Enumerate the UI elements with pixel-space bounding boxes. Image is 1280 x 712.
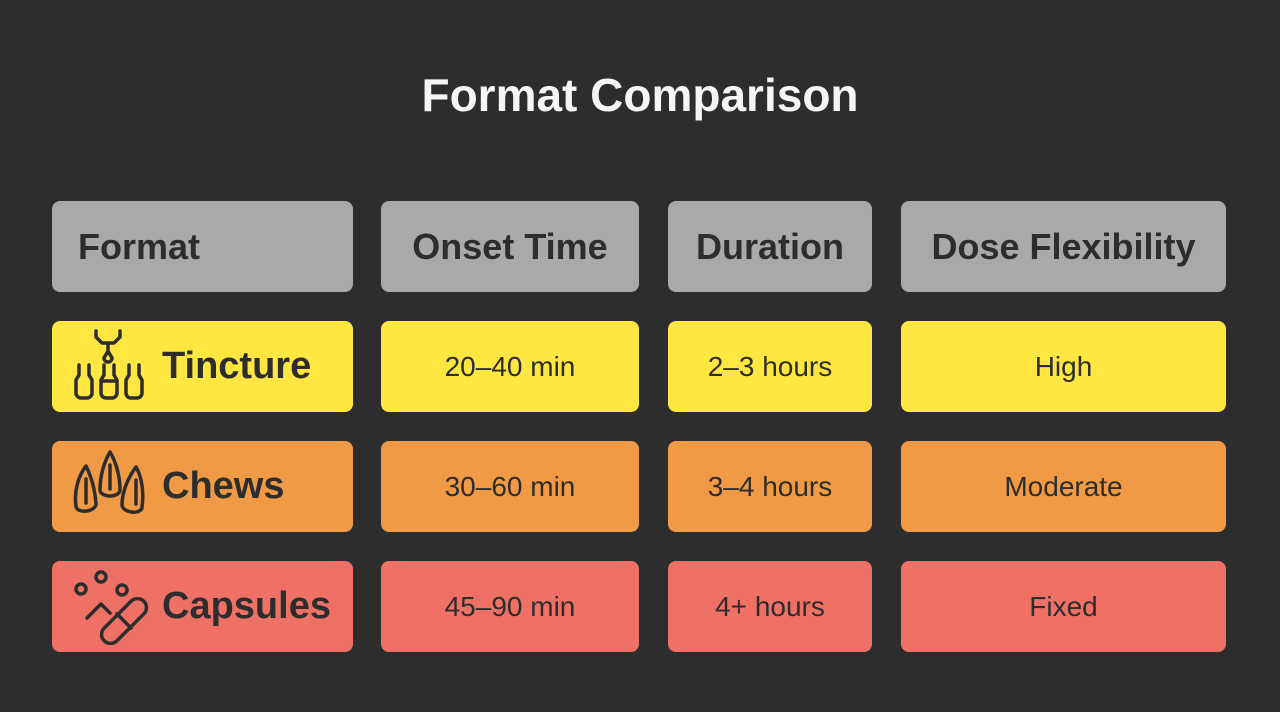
header: format [52,201,353,292]
row: capsules [52,561,1226,652]
format cell: tincture [52,321,353,412]
duration: 3–4 hours [708,470,832,502]
format cell: capsules [52,561,353,652]
format cell: chews: Chews [162,465,284,507]
header row [52,201,1226,292]
flexibility: Moderate [1004,470,1123,502]
header: dose flexibility: Dose Flexibility [931,226,1196,266]
onset [381,321,639,412]
flexibility [901,561,1226,652]
header: format: Format [78,226,200,266]
flexibility [901,321,1226,412]
flexibility [901,441,1226,532]
header: onset time [381,201,639,292]
duration [668,441,872,532]
onset: 30–60 min [445,470,575,502]
header: duration: Duration [696,226,844,266]
title: Format Comparison [421,69,859,121]
flexibility: High [1035,350,1092,382]
row: chews [52,441,1226,532]
icon: chews [74,450,144,514]
onset [381,561,639,652]
duration [668,321,872,412]
format cell: chews [52,441,353,532]
duration: 4+ hours [715,590,825,622]
flexibility: Fixed [1029,590,1098,622]
duration: 2–3 hours [708,350,832,382]
format cell: capsules: Capsules [162,585,331,627]
icon: tincture droppers [74,329,144,400]
icon: capsules [74,570,148,645]
onset [381,441,639,532]
onset: 20–40 min [445,350,575,382]
header: onset time: Onset Time [412,226,608,266]
format cell: tincture: Tincture [162,345,311,387]
duration [668,561,872,652]
onset: 45–90 min [445,590,575,622]
header: dose flexibility [901,201,1226,292]
row: tincture [52,321,1226,412]
header: duration [668,201,872,292]
